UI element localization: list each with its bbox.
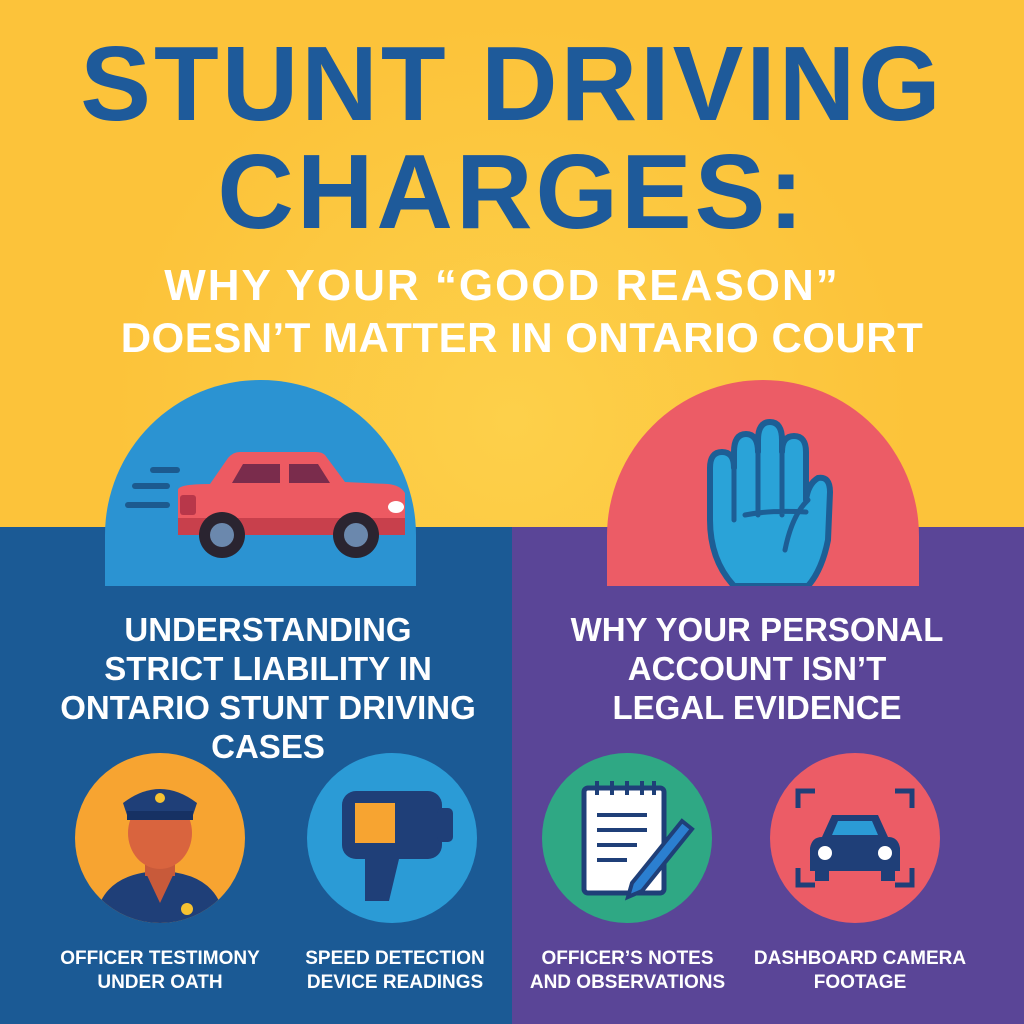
heading: strict liability: STRICT LIABILITY IN xyxy=(104,650,432,687)
caption: officer notes: AND OBSERVATIONS xyxy=(530,972,725,993)
yellow header background xyxy=(0,0,1024,527)
caption: speed detection: SPEED DETECTION xyxy=(305,948,485,969)
title: STUNT DRIVING xyxy=(80,25,944,143)
subtitle xyxy=(121,261,923,361)
caption: dashboard camera xyxy=(754,948,966,993)
left blue panel xyxy=(0,527,512,1024)
caption: speed detection: DEVICE READINGS xyxy=(307,972,483,993)
icon: notepad xyxy=(542,753,712,923)
icon: speeding car xyxy=(125,452,405,558)
caption: officer notes xyxy=(530,948,725,993)
heading: personal account xyxy=(570,611,943,726)
caption: officer testimony xyxy=(60,948,260,993)
icon: dashcam car xyxy=(770,753,940,923)
subtitle: WHY YOUR “GOOD REASON” xyxy=(164,261,840,310)
caption: officer notes: OFFICER’S NOTES xyxy=(541,948,714,969)
icon: stop hand xyxy=(707,419,833,586)
caption: officer testimony: OFFICER TESTIMONY xyxy=(60,948,260,969)
right purple panel xyxy=(512,527,1024,1024)
heading: strict liability: ONTARIO STUNT DRIVING xyxy=(60,689,476,726)
arch: car xyxy=(105,380,416,586)
caption: dashboard camera: FOOTAGE xyxy=(814,972,906,993)
heading: strict liability: CASES xyxy=(211,728,325,765)
heading: personal account: ACCOUNT ISN’T xyxy=(628,650,886,687)
icon: officer xyxy=(75,753,245,923)
heading: personal account: LEGAL EVIDENCE xyxy=(612,689,902,726)
heading: personal account: WHY YOUR PERSONAL xyxy=(571,611,943,648)
caption: dashboard camera: DASHBOARD CAMERA xyxy=(754,948,966,969)
icon: speed gun xyxy=(307,753,477,923)
title: CHARGES: xyxy=(217,133,807,251)
caption: speed detection xyxy=(305,948,485,993)
subtitle: DOESN’T MATTER IN ONTARIO COURT xyxy=(121,314,923,361)
title xyxy=(80,25,944,251)
caption: officer testimony: UNDER OATH xyxy=(97,972,223,993)
heading: strict liability xyxy=(60,611,476,765)
heading: strict liability: UNDERSTANDING xyxy=(124,611,412,648)
arch: hand xyxy=(607,380,919,586)
